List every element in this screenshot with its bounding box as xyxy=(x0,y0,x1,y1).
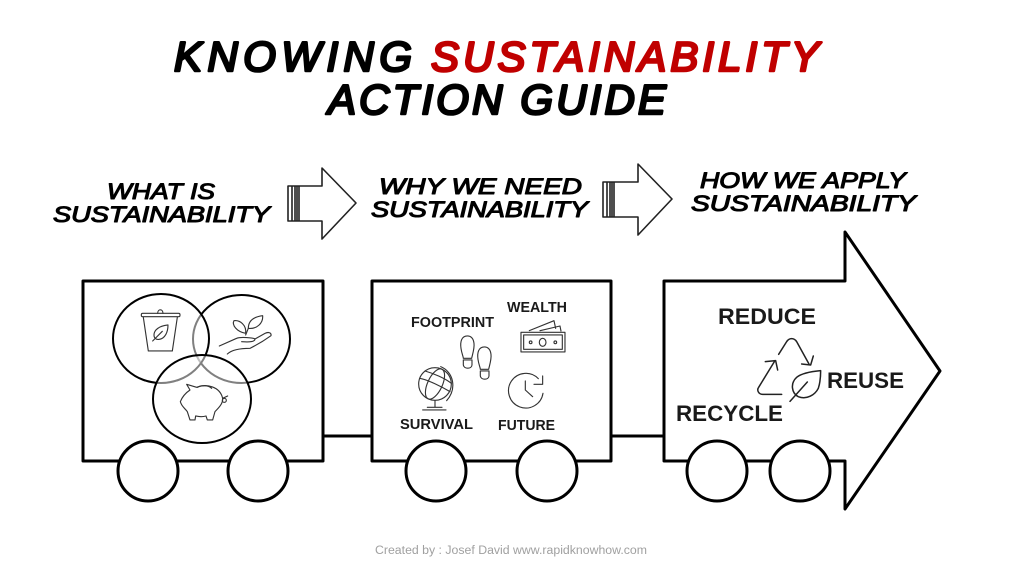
connector: wagon 1 to wagon 2 xyxy=(323,434,372,438)
wheel xyxy=(517,441,577,501)
heading: how we apply sustainability: HOW WE APPLY xyxy=(700,168,908,193)
label: survival: SURVIVAL xyxy=(400,417,473,433)
wheel xyxy=(770,441,830,501)
label: reduce: REDUCE xyxy=(718,304,816,329)
heading: what is sustainability: SUSTAINABILITY xyxy=(53,202,272,227)
heading: how we apply sustainability: SUSTAINABILITY xyxy=(691,191,918,216)
label: reuse: REUSE xyxy=(827,368,904,393)
icon: hand holding plant xyxy=(219,316,271,354)
arrow: what to why xyxy=(288,168,356,239)
arrow: why to how xyxy=(603,164,672,235)
heading: what is sustainability xyxy=(53,179,272,227)
title: SUSTAINABILITY xyxy=(431,33,822,80)
icon: recycling arrows with leaf xyxy=(758,339,821,401)
wheel xyxy=(406,441,466,501)
icon: recycling bin with leaf xyxy=(141,310,180,351)
title xyxy=(174,33,822,123)
label: recycle: RECYCLE xyxy=(676,401,783,426)
panel: why we need sustainability wagon xyxy=(372,281,611,501)
label: future: FUTURE xyxy=(498,418,555,434)
label: wealth: WEALTH xyxy=(507,300,567,316)
wheel xyxy=(228,441,288,501)
title: ACTION GUIDE xyxy=(325,76,667,123)
icon: clock with arrow xyxy=(509,373,543,408)
panel: how we apply sustainability arrow wagon xyxy=(664,232,940,509)
icon: banknotes xyxy=(521,321,565,352)
title: KNOWING xyxy=(174,33,412,80)
icon: globe xyxy=(419,366,453,410)
label: footprint: FOOTPRINT xyxy=(411,315,494,331)
connector: wagon 2 to arrow wagon xyxy=(611,434,664,438)
icon: footprints xyxy=(461,336,491,379)
heading: how we apply sustainability xyxy=(691,168,918,216)
wheel xyxy=(118,441,178,501)
heading: why we need sustainability: SUSTAINABILITY xyxy=(371,197,590,222)
heading: why we need sustainability: WHY WE NEED xyxy=(379,174,582,199)
heading: why we need sustainability xyxy=(371,174,590,222)
panel: what is sustainability wagon xyxy=(83,281,323,501)
footer credit: Created by : Josef David www.rapidknowhow.com xyxy=(375,545,647,557)
wheel xyxy=(687,441,747,501)
heading: what is sustainability: WHAT IS xyxy=(107,179,215,204)
icon: piggy bank xyxy=(180,384,228,420)
venn diagram xyxy=(113,294,290,443)
